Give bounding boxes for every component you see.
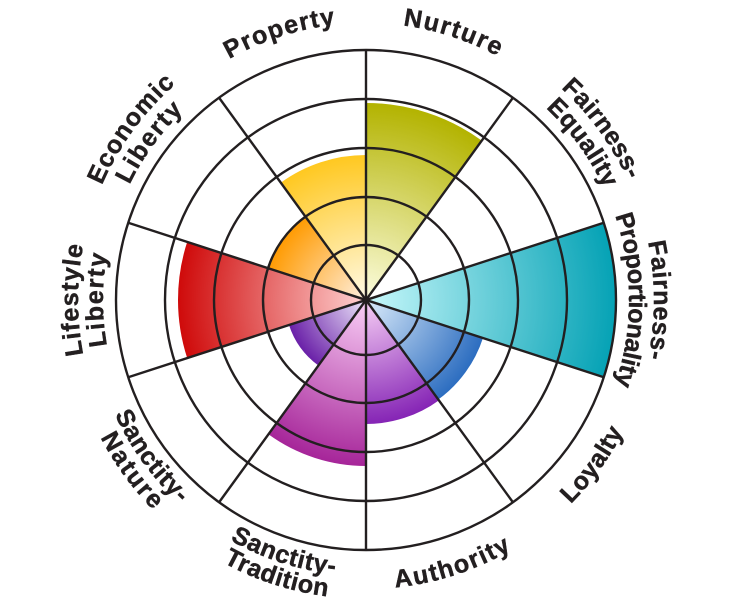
concentric grid and spokes [116,50,616,550]
label: Sanctity-Tradition [228,527,336,596]
label: Loyalty: Loyalty [559,425,624,504]
wedge: Fairness-Proportionality [366,223,649,440]
wedge: Sanctity-Nature [280,272,366,366]
label: Fairness-Proportionality: Fairness- [648,240,672,359]
label: Lifestyle Liberty: Liberty [85,252,111,347]
wedge: Property [281,133,435,300]
label: Economic Liberty: Liberty [114,101,182,184]
label: Lifestyle Liberty [60,244,111,356]
label: Fairness-Equality: Fairness- [562,76,635,178]
label: Fairness-Proportionality [613,212,672,388]
wedge: Lifestyle Liberty [153,195,366,358]
wedge: Authority [307,300,439,443]
wedges: foundation scores [153,103,649,466]
label: Economic Liberty: Economic [86,76,173,184]
label: Authority: Authority [396,538,508,588]
wedge: Economic Liberty [267,210,385,300]
wedge: Loyalty [344,300,483,407]
label: Property: Property [222,11,334,58]
wedge: Sanctity-Tradition [268,300,366,466]
label: Fairness-Equality: Equality [546,96,616,184]
label: Fairness-Proportionality: Proportionality [613,212,648,388]
label: Lifestyle Liberty: Lifestyle [60,244,84,356]
label: Sanctity-Tradition: Sanctity- [232,527,336,577]
label: Nurture: Nurture [404,8,501,54]
label: Sanctity-Nature: Sanctity- [116,409,185,500]
label: Sanctity-Nature: Nature [100,430,160,508]
wedge: Nurture [366,103,482,300]
